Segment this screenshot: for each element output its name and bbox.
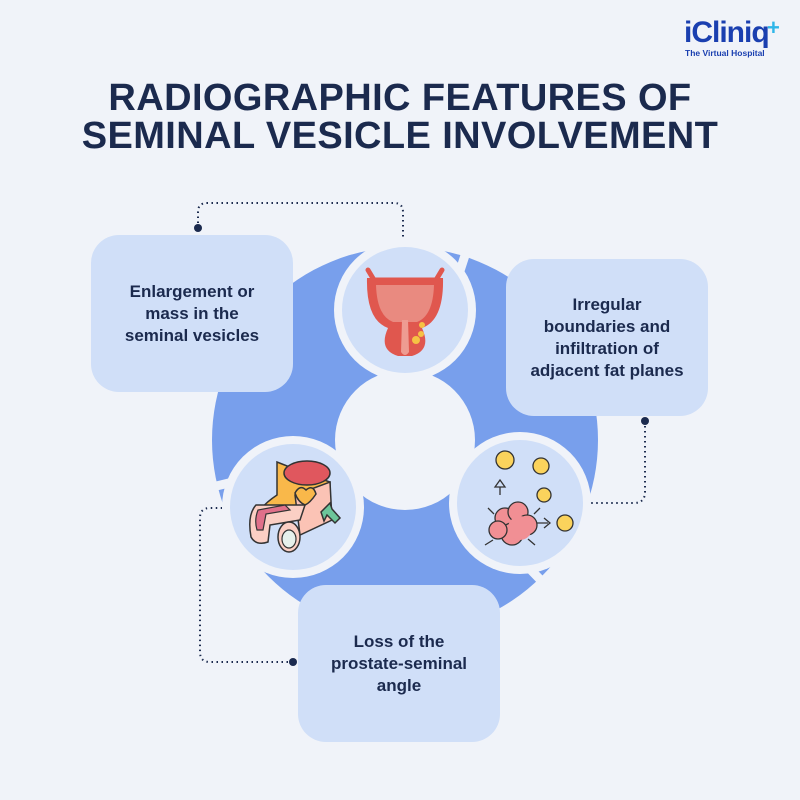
box: irregular boundaries: adjacent fat planes (530, 360, 684, 380)
ring (200, 240, 598, 633)
title: SEMINAL VESICLE INVOLVEMENT (82, 115, 718, 157)
logo (684, 15, 780, 58)
title (82, 77, 718, 157)
logo: + (767, 15, 780, 40)
box: irregular boundaries (506, 259, 708, 416)
logo: iCliniq (684, 16, 769, 49)
box: loss of angle: angle (377, 676, 421, 694)
box: irregular boundaries: Irregular (572, 294, 641, 314)
box: enlargement (91, 235, 293, 392)
box: enlargement: seminal vesicles (125, 326, 259, 344)
icon circle: tumor with cells (449, 432, 591, 574)
logo: The Virtual Hospital (685, 48, 765, 58)
box: enlargement: Enlargement or (130, 282, 254, 300)
box: enlargement: mass in the (145, 304, 239, 322)
box: irregular boundaries: infiltration of (555, 338, 659, 358)
box: irregular boundaries: boundaries and (544, 316, 670, 336)
connector lines (198, 203, 645, 662)
box: loss of angle (298, 585, 500, 742)
title: RADIOGRAPHIC FEATURES OF (108, 77, 692, 119)
box: loss of angle: Loss of the (354, 632, 444, 650)
box: loss of angle: prostate-seminal (331, 654, 467, 672)
icon circle: bladder (334, 239, 476, 381)
icon circle: anatomy with arrow (222, 436, 364, 578)
